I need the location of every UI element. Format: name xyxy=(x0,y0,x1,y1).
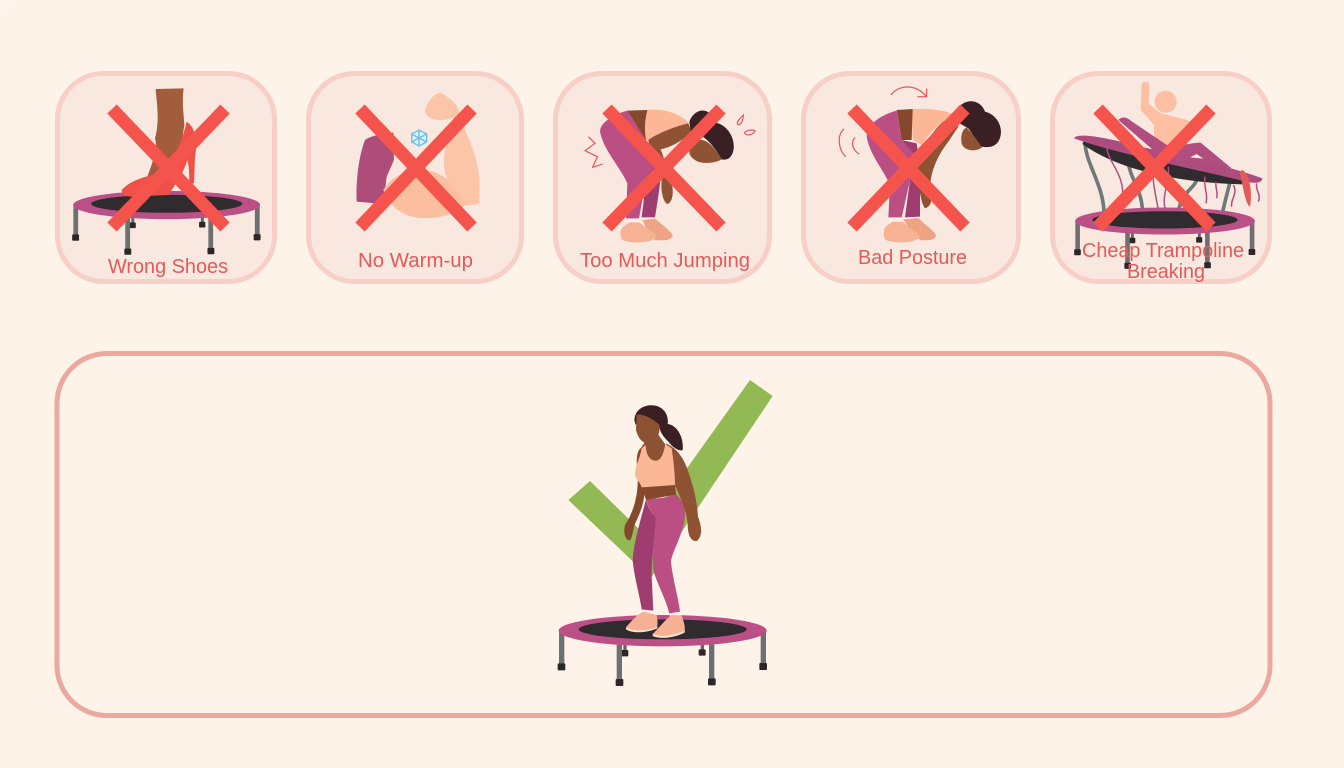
red cross xyxy=(607,109,721,227)
label: cheap trampoline breaking: Cheap Trampoline xyxy=(1082,240,1244,262)
red cross xyxy=(112,109,225,227)
panel: cheap trampoline breaking xyxy=(1052,74,1270,283)
figure: woman standing xyxy=(624,405,701,638)
panel: wrong shoes xyxy=(58,74,274,282)
red cross xyxy=(360,109,472,227)
panel: correct form xyxy=(57,354,1270,716)
label: cheap trampoline breaking: Breaking xyxy=(1127,261,1205,283)
label: wrong shoes: Wrong Shoes xyxy=(108,256,228,278)
trampoline xyxy=(558,615,767,686)
label: too much jumping: Too Much Jumping xyxy=(580,250,750,272)
label: cheap trampoline breaking xyxy=(1082,240,1244,283)
illustration: woman on trampoline with check mark xyxy=(558,380,773,686)
red cross xyxy=(852,109,965,227)
label: bad posture: Bad Posture xyxy=(858,247,967,269)
icon: bent figure in pain xyxy=(585,110,755,242)
panel: bad posture xyxy=(804,74,1018,282)
label: no warm-up: No Warm-up xyxy=(358,250,473,272)
red cross xyxy=(1098,109,1211,227)
panel: too much jumping xyxy=(556,74,770,282)
icon: flexed arm with snowflake xyxy=(357,93,480,218)
icon: breaking trampoline xyxy=(1074,82,1262,269)
icon: green check mark xyxy=(568,380,773,578)
icon: high heel on trampoline xyxy=(72,88,261,255)
icon: figure with rounded back xyxy=(839,87,1001,242)
panel: no warm-up xyxy=(308,74,522,282)
